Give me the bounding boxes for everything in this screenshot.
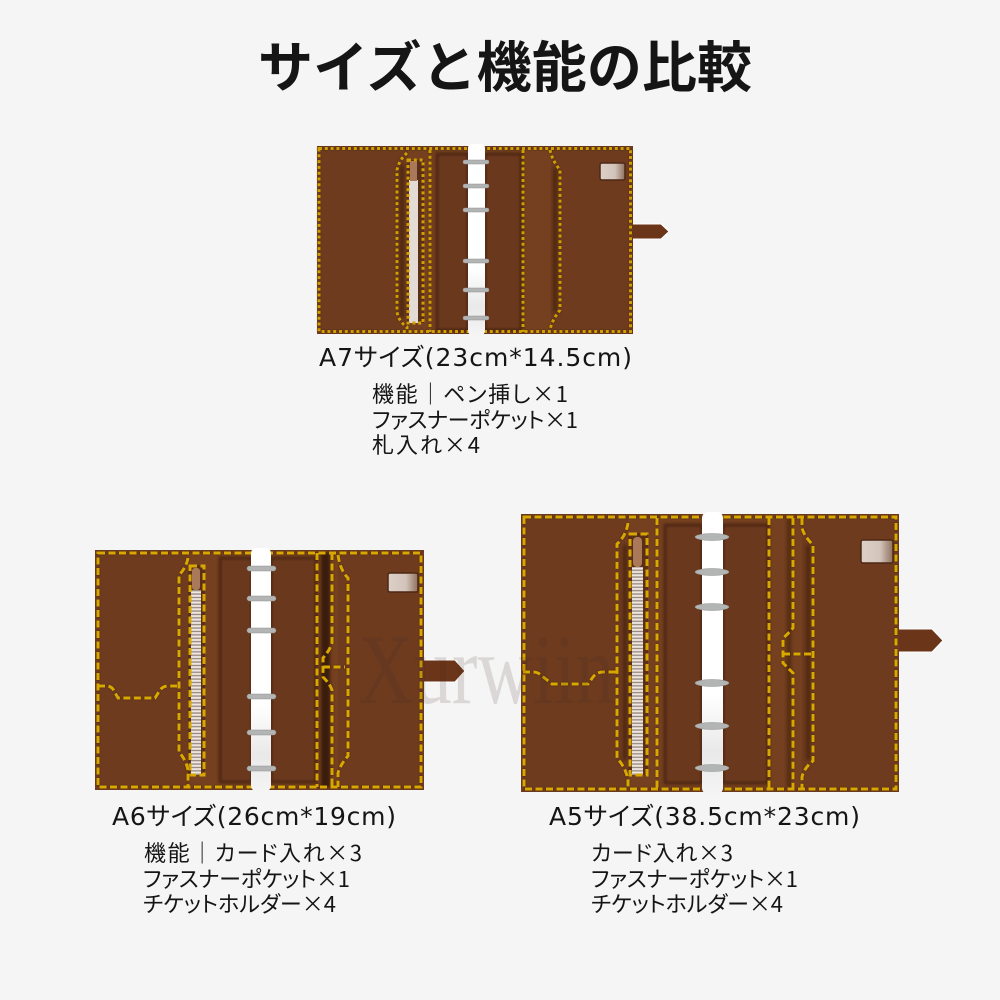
- strap tab: [897, 629, 943, 652]
- A6 feature list: ファスナーポケット×1: [143, 862, 350, 894]
- A5 feature list: ファスナーポケット×1: [591, 862, 798, 894]
- inner panels: [625, 518, 808, 788]
- A5 feature list: カード入れ×3: [591, 836, 733, 868]
- A6 feature list: 機能｜カード入れ×3: [144, 836, 362, 868]
- A6 feature list: [143, 836, 362, 919]
- stitching: [98, 553, 421, 787]
- title: サイズと機能の比較: [258, 37, 752, 99]
- zipper: [188, 565, 205, 775]
- leather cover: [317, 146, 633, 334]
- watermark: Xurwiin: [358, 614, 614, 725]
- binder rings: [247, 566, 276, 771]
- stitching: [319, 148, 630, 332]
- planner: A7 size: [317, 144, 669, 335]
- zipper: [407, 160, 424, 323]
- A5 size label: A5サイズ(38.5cm*23cm): [549, 802, 860, 831]
- A5 feature list: チケットホルダー×4: [591, 887, 783, 919]
- A6 size label: A6サイズ(26cm*19cm): [112, 802, 396, 831]
- closure loop: [600, 163, 625, 180]
- binder spine: [251, 548, 271, 791]
- leather cover: [521, 514, 899, 792]
- inner panels: [402, 150, 555, 332]
- A7 feature list: 札入れ×4: [372, 428, 480, 460]
- A6 feature list: チケットホルダー×4: [143, 887, 336, 919]
- binder rings: [463, 160, 489, 320]
- planner: A6 size: [95, 548, 465, 791]
- closure loop: [388, 573, 418, 592]
- closure loop: [861, 540, 893, 563]
- binder spine: [702, 512, 723, 794]
- A7 size label: A7サイズ(23cm*14.5cm): [319, 343, 632, 372]
- A7 feature list: [372, 377, 578, 460]
- A7 feature list: ファスナーポケット×1: [372, 403, 578, 435]
- A7 feature list: 機能｜ペン挿し×1: [372, 377, 568, 409]
- strap tab: [631, 224, 669, 239]
- zipper: [628, 533, 648, 775]
- planner: A5 size: [521, 512, 943, 794]
- A5 feature list: [591, 836, 798, 919]
- binder rings: [695, 534, 729, 772]
- strap tab: [422, 660, 465, 682]
- leather cover: [95, 550, 424, 790]
- binder spine: [468, 144, 485, 335]
- stitching: [523, 517, 896, 789]
- inner panels: [185, 553, 338, 787]
